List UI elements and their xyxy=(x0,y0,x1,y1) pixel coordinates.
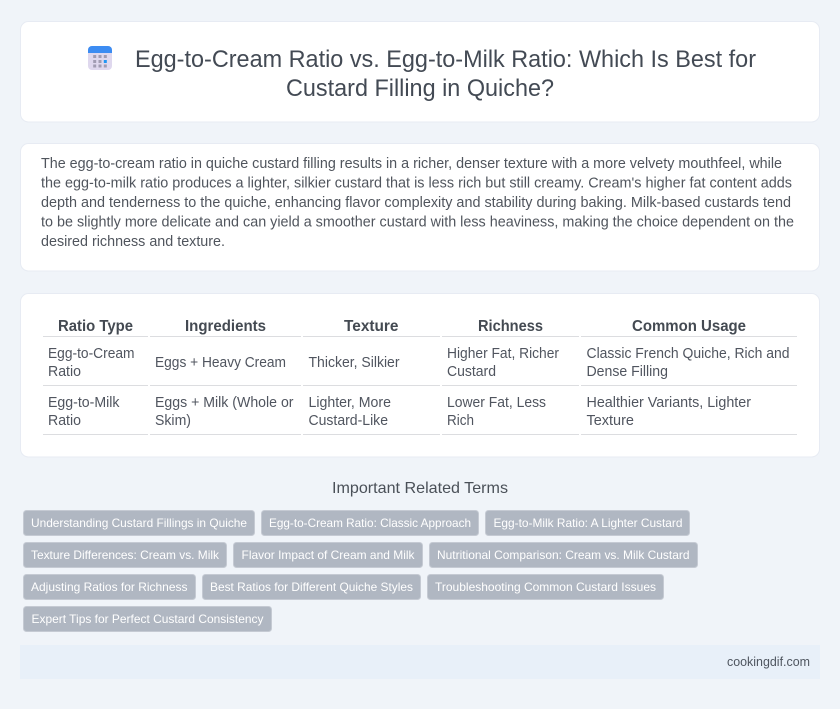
tag xyxy=(202,574,420,600)
text block: description paragraph: depth and tenderness to the quiche, enhancing flavor complexity and stability during baking. Milk-based custards tend xyxy=(41,195,791,211)
panel: header xyxy=(20,22,820,122)
panel: comparison table xyxy=(20,294,820,457)
table row: egg-to-milk: Texture xyxy=(586,413,634,429)
table row: egg-to-milk: Skim) xyxy=(155,413,191,429)
icon: calendar xyxy=(88,46,112,70)
table row: egg-to-milk: Rich xyxy=(447,413,474,429)
table row: egg-to-cream: Custard xyxy=(447,364,496,380)
table header row: Ingredients xyxy=(185,318,266,335)
tag xyxy=(24,510,254,536)
table row: egg-to-milk: Egg-to-Milk xyxy=(48,395,120,411)
table row: egg-to-cream xyxy=(48,346,790,380)
footer xyxy=(20,645,820,679)
table row: egg-to-cream: Egg-to-Cream xyxy=(48,346,135,362)
tag xyxy=(430,542,698,568)
tag: Understanding Custard Fillings in Quiche xyxy=(31,516,247,530)
tag: Troubleshooting Common Custard Issues xyxy=(435,580,656,594)
tag xyxy=(428,574,664,600)
text block: description paragraph: the egg-to-milk ratio produces a lighter, silkier custard that is less rich but still creamy. Cream's higher fat content adds xyxy=(41,176,792,192)
tag xyxy=(234,542,422,568)
text block: description paragraph: The egg-to-cream ratio in quiche custard filling results in a richer, denser texture with a more velvety mouthfeel, while xyxy=(41,156,782,172)
tag xyxy=(24,542,226,568)
table row: egg-to-milk: Healthier Variants, Lighter xyxy=(586,395,751,411)
tag: Texture Differences: Cream vs. Milk xyxy=(31,548,220,562)
table row: egg-to-milk xyxy=(48,395,751,429)
table header row: Common Usage xyxy=(632,318,746,335)
panel: description xyxy=(20,144,820,271)
tag xyxy=(262,510,478,536)
table header row: Texture xyxy=(344,318,399,335)
footer: cookingdif.com xyxy=(727,654,810,669)
table row: egg-to-milk: Custard-Like xyxy=(308,413,388,429)
tag: Adjusting Ratios for Richness xyxy=(31,580,188,594)
title: Custard Filling in Quiche? xyxy=(286,75,554,102)
table row: egg-to-cream: Higher Fat, Richer xyxy=(447,346,559,362)
tag list: related terms xyxy=(24,510,698,632)
table row: egg-to-cream: Classic French Quiche, Rich and xyxy=(586,346,790,362)
table row: egg-to-milk: Lower Fat, Less xyxy=(447,395,546,411)
tag xyxy=(24,574,196,600)
title xyxy=(135,46,756,102)
tag xyxy=(24,606,272,632)
table row: egg-to-cream: Thicker, Silkier xyxy=(308,355,400,371)
tag: Egg-to-Cream Ratio: Classic Approach xyxy=(269,516,471,530)
text block: description paragraph: to be slightly more delicate and can yield a smoother custard with less heaviness, making the choice dependent on the xyxy=(41,214,794,230)
tag: Best Ratios for Different Quiche Styles xyxy=(210,580,413,594)
tag: Egg-to-Milk Ratio: A Lighter Custard xyxy=(494,516,682,530)
tag: Flavor Impact of Cream and Milk xyxy=(242,548,415,562)
table header row: Richness xyxy=(478,318,543,335)
table row: egg-to-cream: Dense Filling xyxy=(586,364,668,380)
tag: Expert Tips for Perfect Custard Consistency xyxy=(32,612,264,626)
heading: related terms: Important Related Terms xyxy=(332,480,508,497)
table row: egg-to-milk: Lighter, More xyxy=(308,395,391,411)
tag xyxy=(486,510,690,536)
table header row: Ratio Type xyxy=(58,318,133,335)
table row: egg-to-milk: Ratio xyxy=(48,413,81,429)
title: Egg-to-Cream Ratio vs. Egg-to-Milk Ratio: Which Is Best for xyxy=(135,46,756,73)
table row: egg-to-cream: Eggs + Heavy Cream xyxy=(155,355,286,371)
tag: Nutritional Comparison: Cream vs. Milk Custard xyxy=(437,548,690,562)
table row: egg-to-milk: Eggs + Milk (Whole or xyxy=(155,395,294,411)
text block: description paragraph: desired richness and texture. xyxy=(41,234,225,250)
text block: description paragraph xyxy=(41,156,794,250)
table header row xyxy=(58,318,746,335)
table row: egg-to-cream: Ratio xyxy=(48,364,81,380)
